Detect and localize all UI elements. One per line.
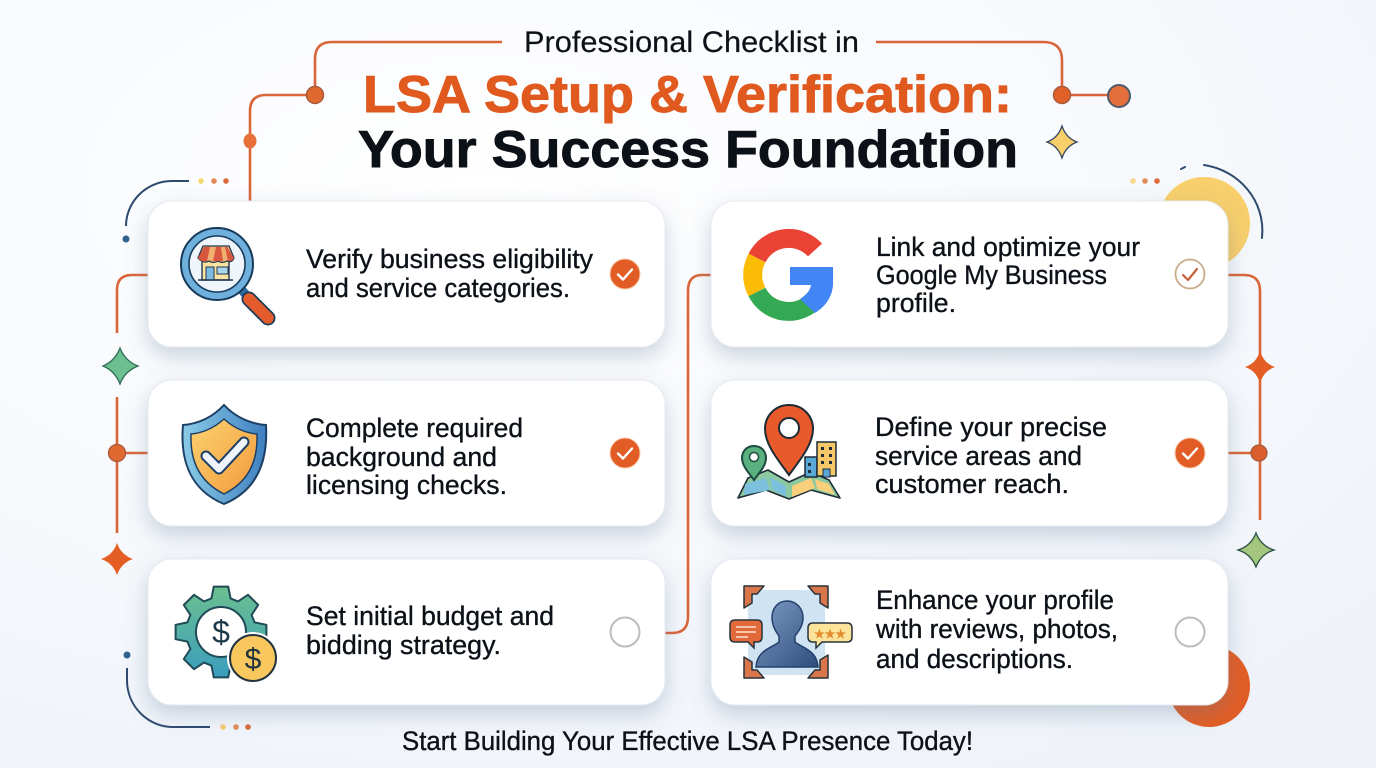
icon: map with pins [738,405,840,499]
sparkle: green right [1238,533,1274,567]
dots: top right [1130,178,1160,184]
status: checked [1175,438,1205,468]
decorative circle: yellow [1158,177,1250,269]
status: unchecked [610,618,640,646]
text: Enhance your profile [876,585,1114,615]
icon: gear with dollar coin: $ [212,614,230,650]
text: profile. [876,288,956,318]
icon: shield with check [182,405,266,504]
text [875,412,1107,499]
text: Verify business eligibility [306,244,594,274]
connector: center [665,275,711,633]
status: checked [610,259,640,289]
sparkle: green left [103,348,138,384]
panel: background checks [148,380,665,526]
panel: enhance profile [711,559,1228,705]
text [306,413,523,500]
text [876,232,1140,318]
connector: top left [250,42,502,201]
decorative arc: navy top right [1181,165,1262,238]
title line 2: Your Success Foundation [358,121,1018,179]
dots: top left [198,178,229,184]
text: Google My Business [876,260,1107,290]
status: checked [610,438,640,468]
text [306,244,594,303]
text: with reviews, photos, [875,614,1118,644]
panel: verify eligibility [148,201,665,347]
sparkle: orange right [1245,350,1275,384]
text: Link and optimize your [876,232,1140,262]
connector: top right [876,42,1119,95]
text: Complete required [306,413,523,443]
dots: bottom left [220,724,251,730]
panel: budget [148,559,665,705]
text [875,585,1118,674]
icon: gear with dollar coin [176,587,279,684]
title line 1: LSA Setup & Verification: [363,66,1012,124]
node: top right large [1108,85,1130,107]
icon: profile with reviews: ★★★ [814,627,846,641]
decorative circle: orange [1168,645,1250,727]
icon: gear with dollar coin: $ [245,643,262,676]
text: Define your precise [875,412,1107,442]
text: licensing checks. [306,470,507,500]
decoration: navy arc top left [122,181,189,242]
subtitle: Professional Checklist in [524,26,859,59]
text [306,601,554,660]
icon: magnifier over storefront [181,228,268,318]
icon: Google G [753,238,833,313]
status: unchecked [1176,618,1204,646]
icon: profile with reviews [730,586,852,678]
panel: service areas [711,380,1228,526]
text: Set initial budget and [306,601,554,631]
node: right [1251,445,1267,461]
text: service areas and [875,441,1082,471]
connector: left upper [117,275,148,333]
node: left [108,444,126,462]
node: top left small [244,134,256,148]
sparkle: yellow [1047,126,1077,158]
text: and service categories. [306,273,570,303]
connector: left lower [117,397,148,533]
text: customer reach. [875,469,1069,499]
panel: google profile [711,201,1228,347]
text: and descriptions. [876,644,1073,674]
footer call to action: Start Building Your Effective LSA Presence Today! [402,726,973,756]
sparkle: orange left [101,543,133,575]
text: bidding strategy. [306,630,501,660]
text: background and [306,442,497,472]
status: outline check [1176,260,1204,288]
connector: right [1228,275,1260,520]
node: top left large [306,86,324,104]
decoration: navy arc bottom left [124,652,210,727]
node: top right small [1054,86,1070,104]
